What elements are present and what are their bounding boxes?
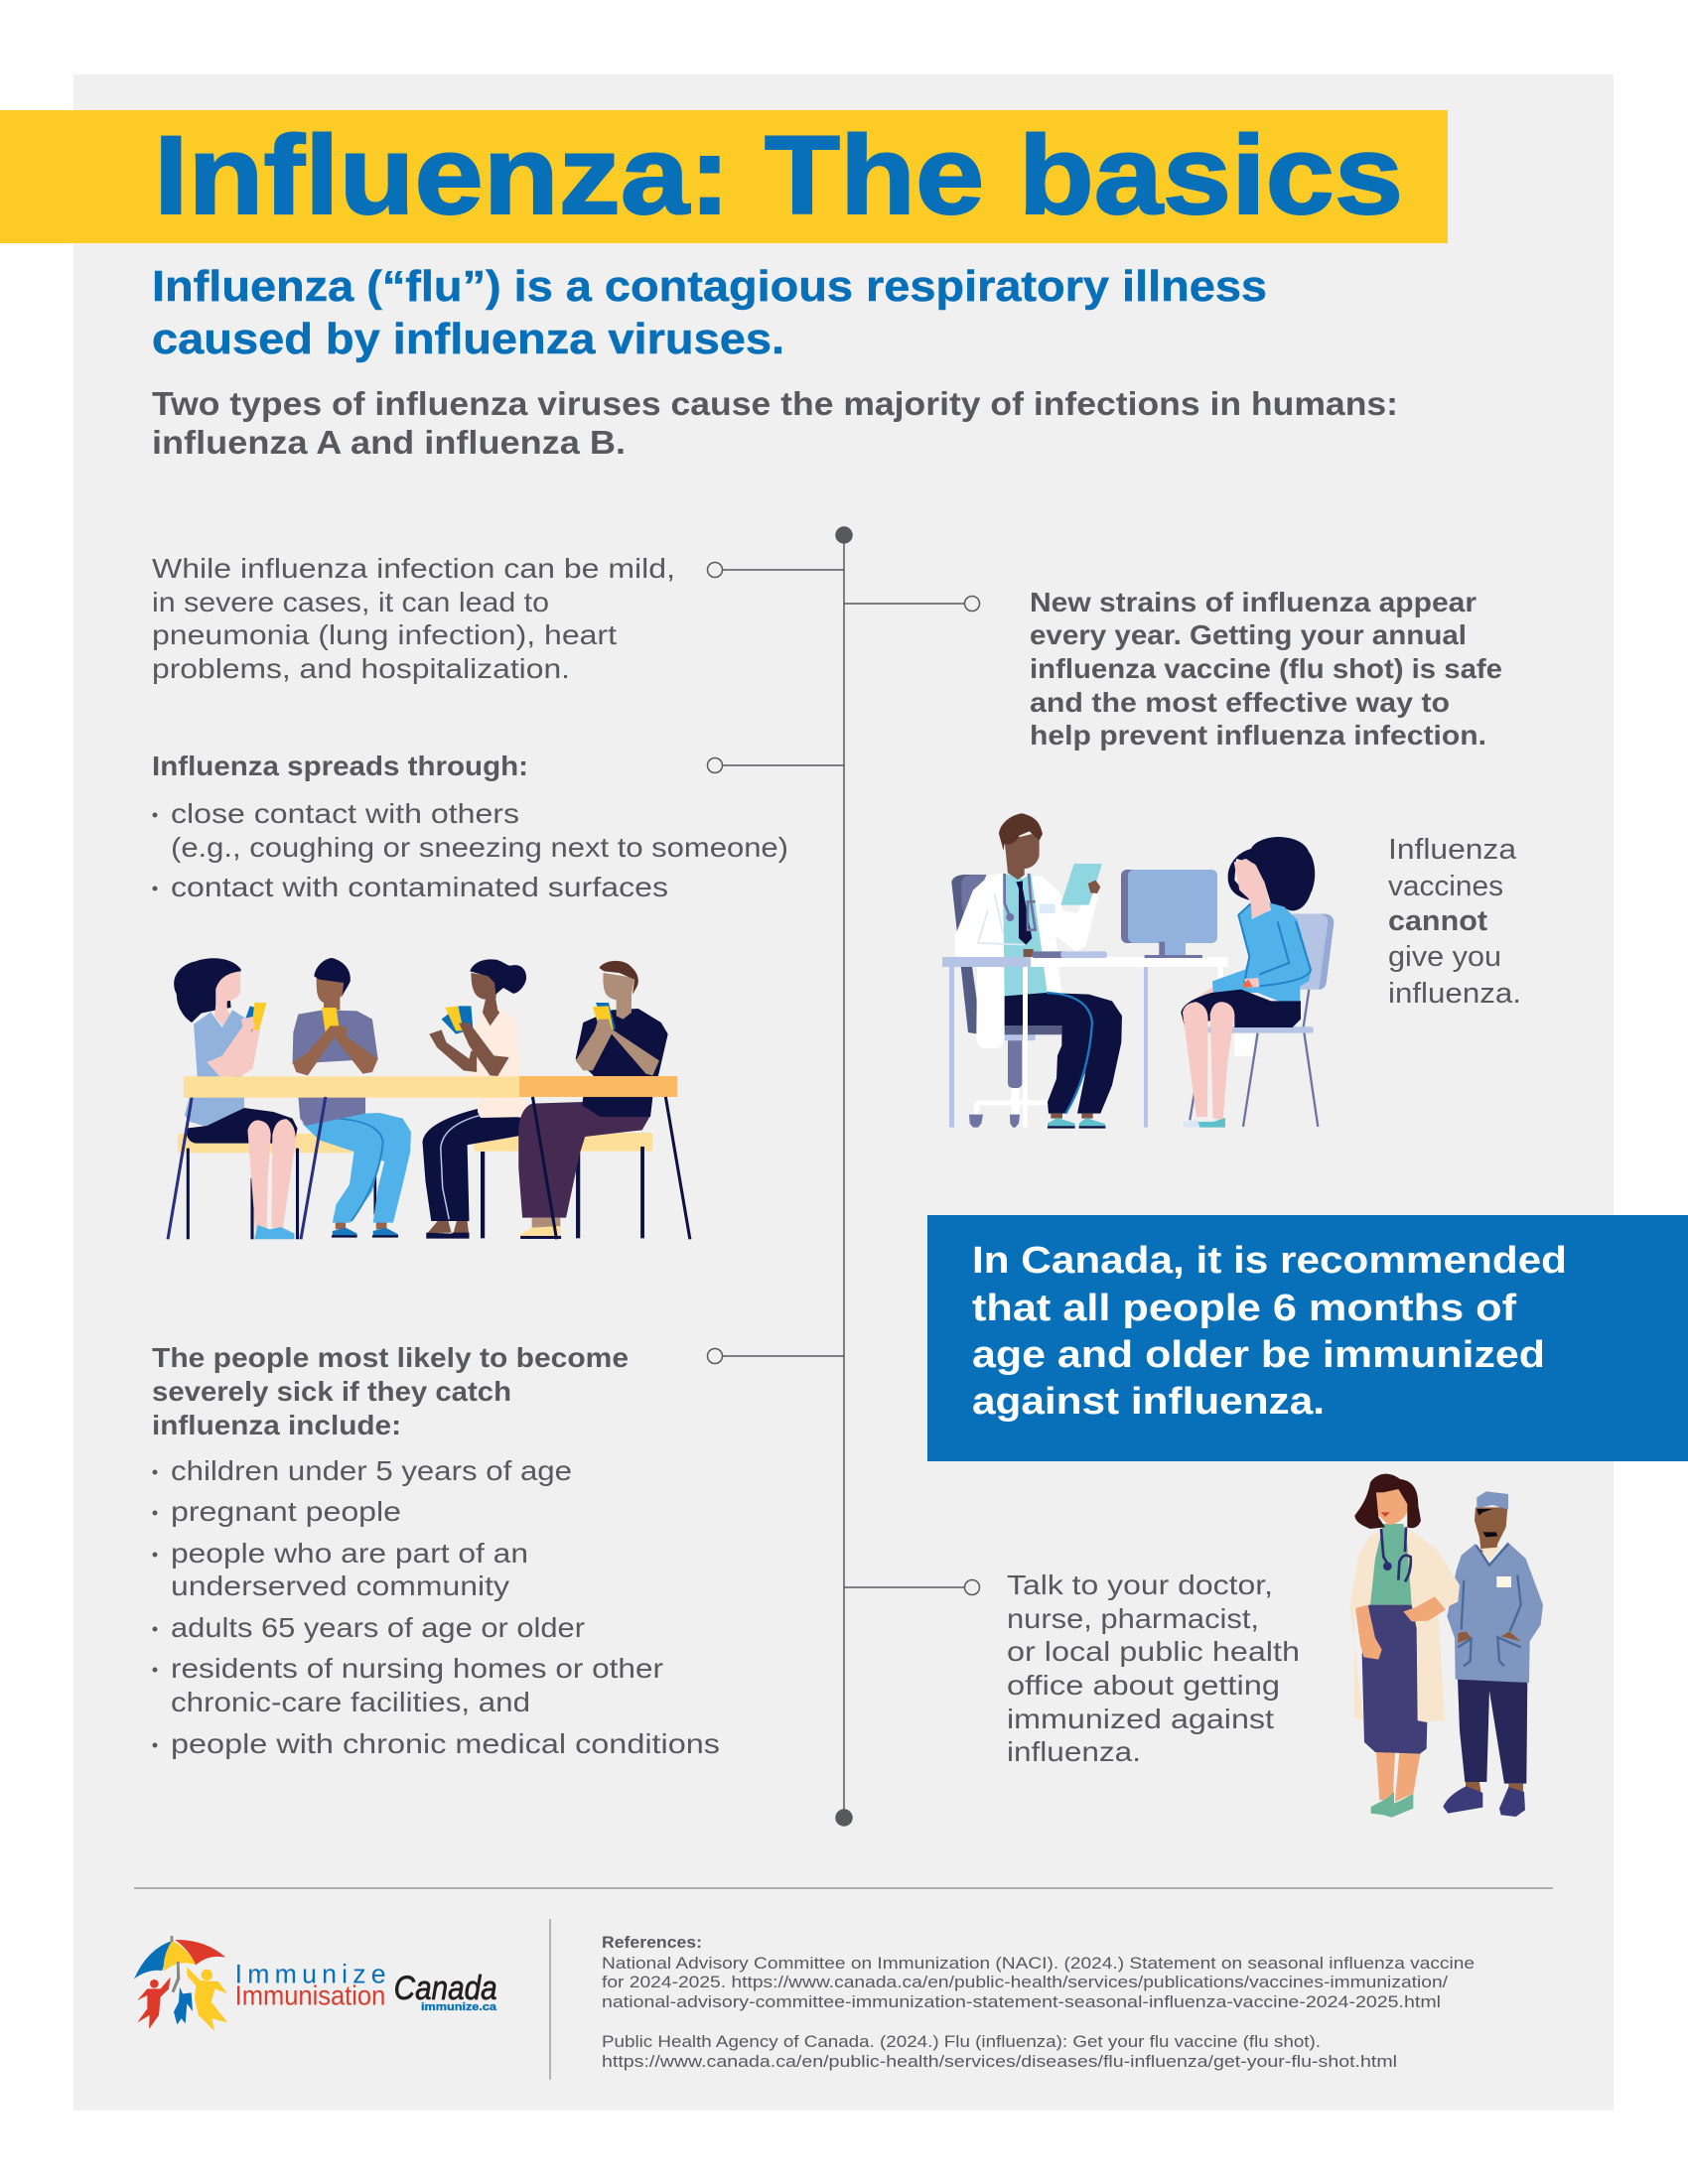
text: new strains: every year. Getting your annual <box>1030 619 1467 650</box>
text: people most likely to become sick: residents of nursing homes or other <box>171 1653 663 1684</box>
references: for 2024-2025. https://www.canada.ca/en/public-health/services/publications/vaccines-immunization/ <box>602 1974 1448 1991</box>
callout: recommendation: against influenza. <box>972 1381 1325 1423</box>
title banner: Influenza: The basics <box>154 113 1403 237</box>
text: talk to your doctor: immunized against <box>1007 1704 1274 1734</box>
text: people most likely to become sick: severely sick if they catch <box>152 1376 511 1407</box>
text: severity: While influenza infection can be mild, <box>152 553 675 584</box>
logo wordmark: Canada <box>394 1970 497 2007</box>
text: vaccines cannot give you influenza: cannot <box>1388 905 1487 937</box>
intro text: influenza A and influenza B. <box>152 424 626 461</box>
subheading: caused by influenza viruses. <box>152 315 784 363</box>
text: people most likely to become sick: chronic-care facilities, and <box>171 1687 530 1717</box>
text: vaccines cannot give you influenza: give you <box>1388 941 1501 973</box>
text: people most likely to become sick: influenza include: <box>152 1410 401 1440</box>
logo wordmark <box>235 1959 497 2013</box>
text: how influenza spreads: close contact with others <box>171 798 519 829</box>
text: new strains: and the most effective way to <box>1030 687 1450 718</box>
intro text: Two types of influenza viruses cause the majority of infections in humans: <box>152 385 1398 422</box>
text: talk to your doctor: influenza. <box>1007 1736 1141 1767</box>
text: new strains: influenza vaccine (flu shot) is safe <box>1030 653 1502 684</box>
subheading <box>152 262 1267 363</box>
man in scrubs <box>1443 1491 1543 1817</box>
text: people most likely to become sick: The people most likely to become <box>152 1342 629 1373</box>
text: vaccines cannot give you influenza <box>1388 834 1521 1010</box>
references: national-advisory-committee-immunization-statement-seasonal-influenza-vaccine-2024-2025.html <box>602 1993 1441 2011</box>
logo: Immunize Canada <box>134 1936 497 2031</box>
text: talk to your doctor: nurse, pharmacist, <box>1007 1603 1259 1634</box>
logo people <box>137 1968 227 2031</box>
text: new strains: help prevent influenza infection. <box>1030 720 1486 751</box>
text: talk to your doctor: or local public health <box>1007 1636 1300 1667</box>
text: how influenza spreads: Influenza spreads through: <box>152 751 528 781</box>
desk and computer <box>942 870 1228 1128</box>
callout: recommendation: age and older be immunized <box>972 1334 1545 1376</box>
references: https://www.canada.ca/en/public-health/services/diseases/flu-influenza/get-your-flu-shot.html <box>602 2053 1397 2071</box>
person 2 <box>293 958 411 1238</box>
illustration: four people at a table <box>168 958 690 1239</box>
text: how influenza spreads <box>152 751 788 902</box>
references: References: <box>602 1934 702 1952</box>
table <box>168 1076 690 1239</box>
text: talk to your doctor: Talk to your doctor, <box>1007 1570 1273 1600</box>
timeline <box>707 527 979 1826</box>
logo umbrella <box>134 1936 225 1992</box>
logo wordmark: immunize.ca <box>421 2001 497 2013</box>
text: people most likely to become sick: people with chronic medical conditions <box>171 1728 720 1759</box>
subheading: Influenza (“flu”) is a contagious respiratory illness <box>152 262 1267 311</box>
callout: recommendation: that all people 6 months of <box>972 1288 1516 1329</box>
intro text <box>152 385 1398 461</box>
logo wordmark: Immunize <box>235 1959 386 1988</box>
patient <box>1181 837 1334 1128</box>
text: severity: problems, and hospitalization. <box>152 653 570 684</box>
person 4 <box>518 961 668 1239</box>
text: people most likely to become sick <box>152 1342 720 1759</box>
text: severity: in severe cases, it can lead to <box>152 587 549 617</box>
woman with lab coat <box>1349 1474 1460 1818</box>
text: vaccines cannot give you influenza: influenza. <box>1388 978 1521 1010</box>
illustration: doctor and patient at desk <box>942 813 1334 1129</box>
references: Public Health Agency of Canada. (2024.) Flu (influenza): Get your flu vaccine (flu shot). <box>602 2033 1321 2051</box>
text: severity: pneumonia (lung infection), heart <box>152 619 617 650</box>
text: people most likely to become sick: underserved community <box>171 1570 509 1601</box>
person 1 <box>174 958 298 1239</box>
text: new strains <box>1030 587 1502 751</box>
doctor <box>955 813 1122 1129</box>
text: talk to your doctor: office about getting <box>1007 1670 1280 1701</box>
text: vaccines cannot give you influenza: Influenza <box>1388 834 1517 866</box>
doctor's chair <box>951 875 1061 1128</box>
text: how influenza spreads: contact with contaminated surfaces <box>171 872 668 902</box>
logo wordmark: Immunisation <box>235 1979 385 2010</box>
callout: recommendation: In Canada, it is recommended <box>972 1240 1567 1282</box>
text: talk to your doctor <box>1007 1570 1300 1767</box>
text: people most likely to become sick: adults 65 years of age or older <box>171 1612 585 1643</box>
text: severity <box>152 553 675 684</box>
text: people most likely to become sick: children under 5 years of age <box>171 1455 572 1486</box>
footer rule <box>134 1888 1553 2080</box>
illustration: health-care workers <box>1349 1474 1543 1818</box>
text: how influenza spreads: (e.g., coughing or sneezing next to someone) <box>171 832 788 863</box>
references <box>602 1934 1475 2071</box>
chair seats and legs <box>178 1133 652 1239</box>
person 3 <box>422 959 532 1239</box>
text: vaccines cannot give you influenza: vaccines <box>1388 871 1503 902</box>
callout: recommendation <box>927 1215 1688 1461</box>
text: people most likely to become sick: pregnant people <box>171 1496 401 1527</box>
text: new strains: New strains of influenza appear <box>1030 587 1477 617</box>
text: people most likely to become sick: people who are part of an <box>171 1538 528 1569</box>
references: National Advisory Committee on Immunization (NACI). (2024.) Statement on seasonal influenza vaccine <box>602 1955 1475 1973</box>
